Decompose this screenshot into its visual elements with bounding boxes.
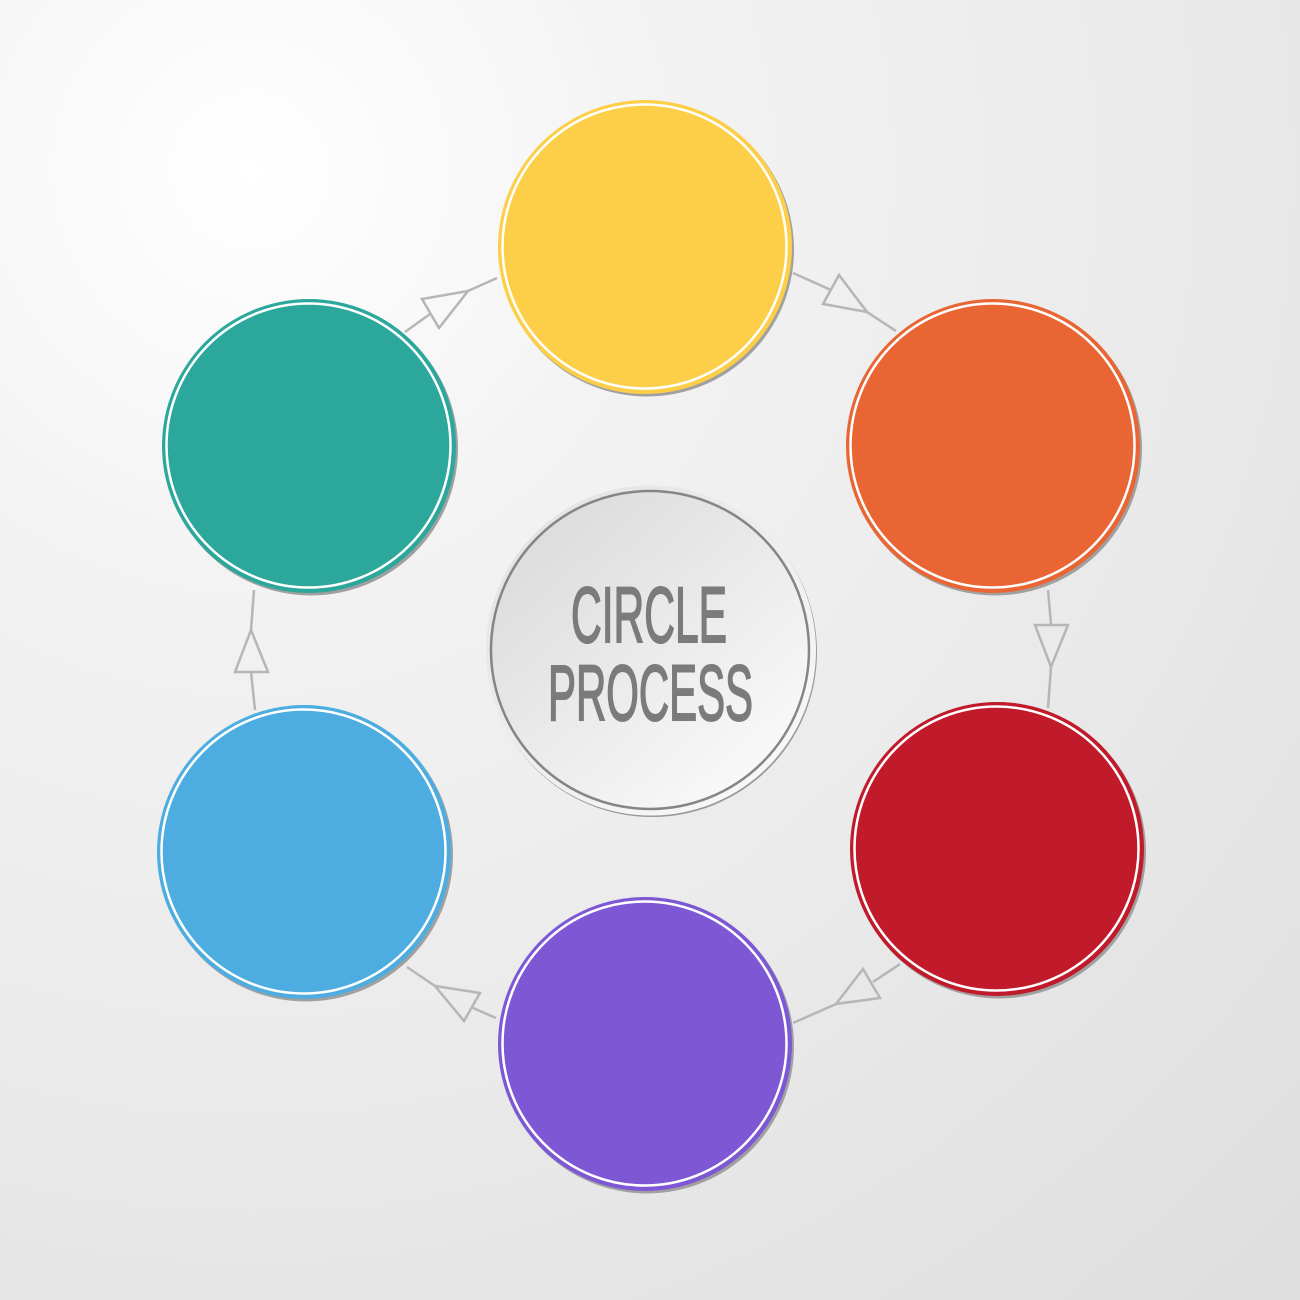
circle: orange <box>846 299 1142 596</box>
center hub circle <box>486 486 817 817</box>
arrow: red to purple <box>793 964 900 1023</box>
circle: teal <box>162 299 458 596</box>
arrow: orange to red <box>1035 590 1068 708</box>
circle: red <box>850 702 1146 998</box>
arrow: yellow to orange <box>793 273 896 331</box>
title: CIRCLE <box>571 570 727 659</box>
circle: yellow <box>498 100 794 396</box>
circle: purple <box>498 897 794 1194</box>
arrow: blue to teal <box>235 590 268 710</box>
title: PROCESS <box>548 648 753 737</box>
title <box>548 570 753 737</box>
circle: blue <box>157 705 453 1002</box>
arrow: teal to yellow <box>405 278 497 332</box>
arrow: purple to blue <box>407 967 496 1021</box>
